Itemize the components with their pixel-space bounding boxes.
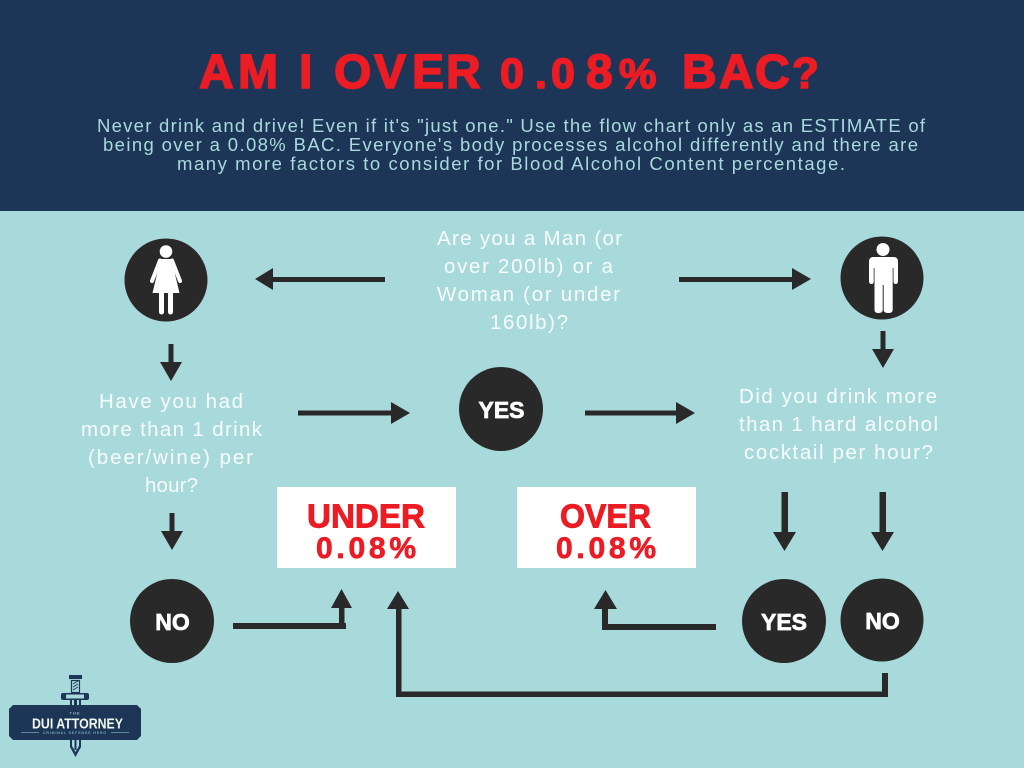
arrow: man down [872,331,894,368]
arrow: no to under [233,589,352,629]
no node right [840,578,924,662]
arrow: question to woman [255,268,385,290]
question: beer or wine: Have you had [99,390,243,413]
arrow: yes to over [594,590,716,630]
intro text: many more factors to consider for Blood Alcohol Content percentage. [177,153,845,174]
yes node center: YES [478,397,525,423]
logo: the dui attorney: DUI ATTORNEY [32,716,123,732]
result box: over [517,487,696,568]
arrow: yes to hard alcohol question [585,402,695,424]
arrow: no to under long route [387,591,888,697]
question: beer or wine: more than 1 drink [81,418,263,441]
arrow: drink question to no [161,513,183,550]
intro text: being over a 0.08% BAC. Everyone's body processes alcohol differently and there are [103,134,918,155]
question: beer or wine [81,390,263,497]
result box: under: UNDER [307,498,425,534]
yes node center [459,367,543,451]
logo: the dui attorney: CRIMINAL DEFENSE HERO [43,731,107,735]
yes node right [742,579,826,663]
result box: under: 0.08% [316,532,416,565]
no node left: NO [155,609,190,635]
intro text: Never drink and drive! Even if it's "just one." Use the flow chart only as an ESTIMATE of [97,115,926,136]
arrow: drink question to yes [298,402,410,424]
result box: under [277,487,456,568]
intro text [97,115,926,174]
no node right: NO [865,608,900,634]
no node left [130,579,214,663]
result box: over: OVER [560,498,651,534]
icon: woman [124,238,208,322]
result box: over: 0.08% [556,532,656,565]
title: AM I OVER 0.08% BAC? [199,46,819,99]
question: man or woman [437,227,622,334]
question: man or woman: Woman (or under [437,283,620,306]
question: hard alcohol: cocktail per hour? [744,441,933,464]
question: beer or wine: hour? [145,474,198,497]
arrow: woman down [160,344,182,381]
question: man or woman: 160lb)? [490,311,568,334]
logo: the dui attorney: THE [70,710,80,716]
yes node right: YES [761,609,807,635]
question: man or woman: Are you a Man (or [437,227,622,250]
arrow: hard alcohol to no [871,492,894,551]
arrow: hard alcohol to yes [773,492,796,551]
question: hard alcohol: Did you drink more [739,385,937,408]
header panel [0,0,1024,211]
arrow: question to man [679,268,811,290]
question: beer or wine: (beer/wine) per [88,446,253,469]
question: hard alcohol [739,385,938,464]
question: man or woman: over 200lb) or a [444,255,614,278]
logo: the dui attorney [9,675,141,757]
sword [61,675,89,757]
icon: man [840,236,924,320]
question: hard alcohol: than 1 hard alcohol [739,413,938,436]
